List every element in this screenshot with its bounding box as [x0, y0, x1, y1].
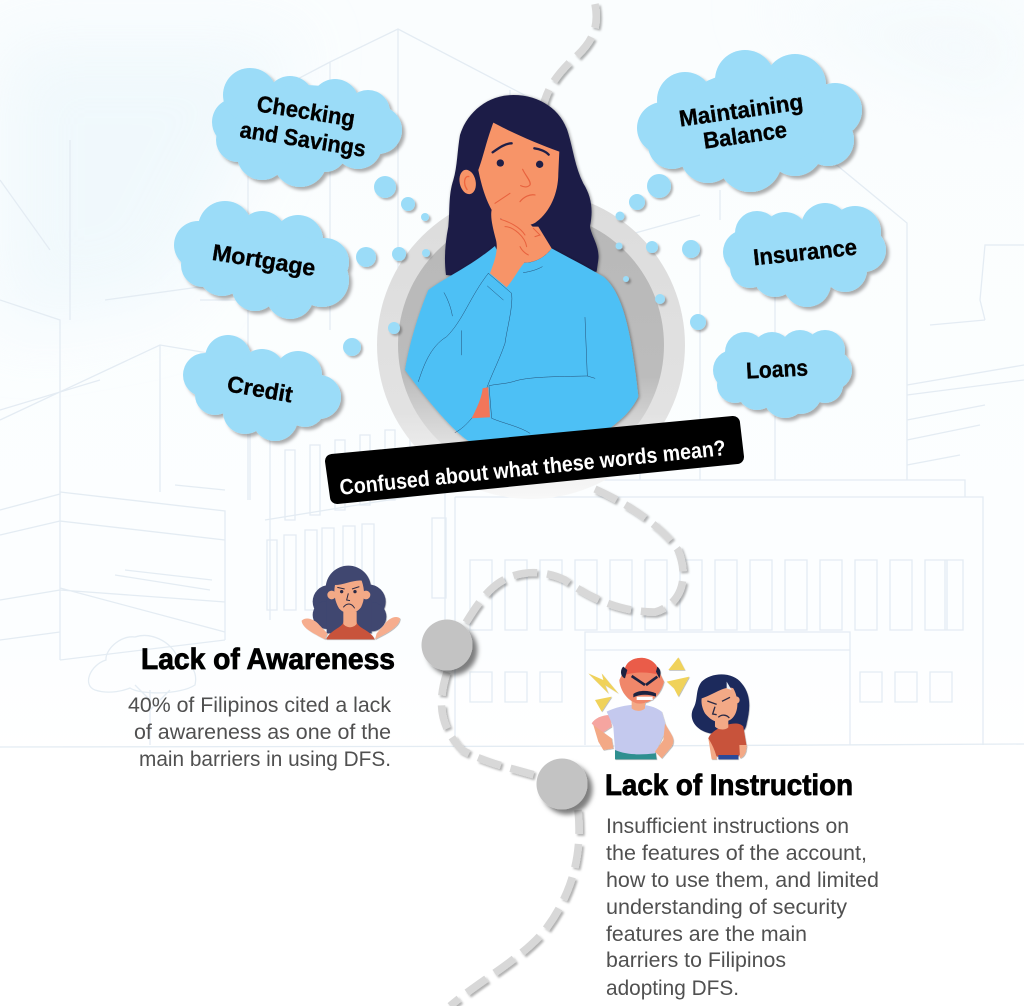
text: Lack of Instruction description: [606, 814, 879, 1000]
icon: angry man and sad woman: [588, 657, 749, 759]
text: Lack of Awareness description: [128, 693, 391, 771]
cloud: Insurance: [723, 203, 886, 307]
text: Lack of Instruction description: how to use them, and limited: [606, 868, 879, 892]
timeline node 1: [422, 620, 472, 670]
text: Lack of Instruction description: features are the main: [606, 922, 807, 946]
dashed path: bottom segment: [450, 810, 579, 1006]
text: Lack of Awareness description: main barriers in using DFS.: [139, 747, 391, 771]
thought bubbles: dots: [343, 174, 706, 356]
cloud: Loans: Loans: [745, 354, 809, 384]
text: Lack of Instruction description: Insufficient instructions on: [606, 814, 849, 838]
cloud: Loans: [713, 330, 852, 418]
text: Lack of Instruction description: the features of the account,: [606, 841, 867, 865]
thinking woman illustration: [405, 95, 638, 442]
cloud: Checking and Savings: and Savings: [238, 116, 368, 162]
timeline node 2: [536, 758, 588, 810]
backdrop circles behind woman: [377, 191, 685, 499]
cloud: Maintaining Balance: [637, 50, 862, 192]
text: Lack of Awareness description: of awareness as one of the: [134, 720, 391, 744]
cloud: Mortgage: [174, 201, 349, 319]
lower hand: [472, 387, 490, 418]
cloud: Checking and Savings: Checking: [255, 90, 357, 132]
cloud: Credit: Credit: [225, 370, 295, 408]
cloud: Insurance: Insurance: [752, 234, 858, 270]
face: [478, 123, 559, 225]
neck: [497, 227, 552, 263]
eyes and brows: [497, 159, 504, 167]
cloud: Maintaining Balance: Balance: [702, 116, 788, 154]
text: Lack of Awareness description: 40% of Filipinos cited a lack: [128, 693, 391, 717]
banner: Confused about what these words mean?: Confused about what these words mean?: [338, 435, 727, 500]
dashed path: middle segment to first node: [455, 489, 683, 640]
dashed path: between nodes: [441, 672, 545, 778]
hand: [490, 193, 536, 287]
angry man: [588, 657, 689, 759]
heading: Lack of Instruction: Lack of Instruction: [605, 769, 853, 802]
ear: [457, 168, 478, 196]
dashed path: top segment: [540, 4, 596, 118]
text: Lack of Instruction description: barriers to Filipinos: [606, 948, 786, 972]
cloud: Credit: [183, 335, 341, 441]
nose and mouth: [520, 169, 535, 202]
background: sketched building: [0, 0, 1024, 750]
icon: shrugging woman: [302, 566, 400, 639]
hair: [445, 95, 599, 280]
sweater: [405, 246, 638, 442]
cloud: Maintaining Balance: Maintaining: [677, 88, 805, 132]
cloud: Checking and Savings: [212, 68, 402, 187]
text: Lack of Instruction description: understanding of security: [606, 895, 847, 919]
text: Lack of Instruction description: adopting DFS.: [606, 976, 739, 1000]
heading: Lack of Awareness: Lack of Awareness: [141, 643, 395, 676]
sad woman: [692, 674, 749, 759]
sleeve and fold lines: [418, 267, 595, 433]
cloud: Mortgage: Mortgage: [211, 239, 317, 281]
